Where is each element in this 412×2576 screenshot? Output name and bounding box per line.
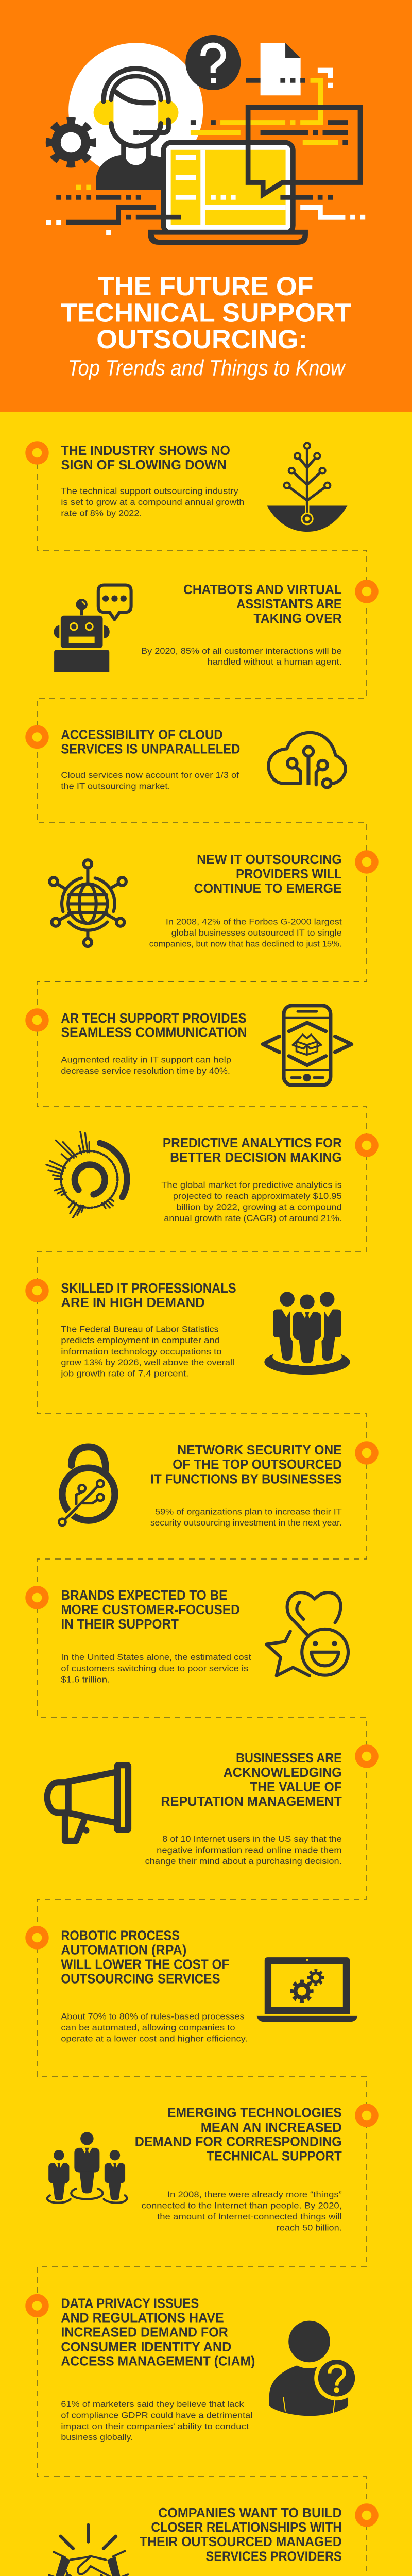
- heading: [140, 2506, 342, 2564]
- body text: In the United States alone, the estimated cost: [61, 1652, 251, 1662]
- panel: robotic process automation: [61, 1928, 357, 2043]
- heading: NETWORK SECURITY ONE: [177, 1443, 342, 1458]
- heading: ROBOTIC PROCESS: [61, 1928, 180, 1943]
- heading: SERVICES IS UNPARALLELED: [61, 742, 240, 757]
- body text: can be automated, allowing companies to: [61, 2023, 235, 2032]
- heading: IN THEIR SUPPORT: [61, 1617, 179, 1632]
- icon: AR phone: [263, 1006, 352, 1085]
- body text: grow 13% by 2026, well above the overall: [61, 1358, 234, 1367]
- heading: NEW IT OUTSOURCING: [197, 853, 342, 867]
- body text: predicts employment in computer and: [61, 1335, 220, 1345]
- panel: emerging technologies: [47, 2106, 342, 2233]
- body text: [150, 1506, 342, 1528]
- body text: annual growth rate (CAGR) of around 21%.: [164, 1213, 342, 1223]
- heading: DATA PRIVACY ISSUES: [61, 2297, 199, 2311]
- timeline nodes: [29, 445, 375, 2576]
- panel: orange hero header: [0, 0, 412, 412]
- panel: skilled IT professionals: [60, 1281, 350, 1379]
- heading: IT FUNCTIONS BY BUSINESSES: [150, 1472, 342, 1486]
- heading: AUTOMATION (RPA): [61, 1943, 186, 1957]
- heading: [61, 728, 240, 757]
- panel: predictive analytics: [161, 1136, 342, 1223]
- heading: SIGN OF SLOWING DOWN: [61, 458, 227, 472]
- panel: customer focused brands: [61, 1588, 348, 1685]
- body text: About 70% to 80% of rules-based processes: [61, 2011, 244, 2021]
- body text: In 2008, there were already more “things”: [167, 2190, 342, 2199]
- heading: [61, 444, 230, 472]
- icon: business team: [264, 1292, 350, 1375]
- body text: [61, 486, 244, 518]
- heading: [61, 2297, 255, 2368]
- heading: WILL LOWER THE COST OF: [61, 1958, 229, 1972]
- heading: AND REGULATIONS HAVE: [61, 2311, 224, 2326]
- body text: security outsourcing investment in the next year.: [150, 1518, 342, 1528]
- body text: Cloud services now account for over 1/3 of: [61, 770, 239, 780]
- panel: AR tech support: [61, 1006, 352, 1085]
- heading: SERVICES PROVIDERS: [205, 2549, 342, 2564]
- body text: billion by 2022, growing at a compound: [176, 1202, 342, 1212]
- heading: ARE IN HIGH DEMAND: [61, 1296, 205, 1310]
- icon: globe network: [49, 860, 126, 946]
- body text: [149, 917, 342, 949]
- icon: cloud circuit: [268, 733, 346, 787]
- body text: the IT outsourcing market.: [61, 782, 170, 791]
- heading: MEAN AN INCREASED: [201, 2121, 342, 2135]
- body text: of customers switching due to poor service is: [61, 1664, 248, 1673]
- heading: OF THE TOP OUTSOURCED: [173, 1458, 342, 1472]
- body text: The Federal Bureau of Labor Statistics: [61, 1324, 218, 1334]
- title: OUTSOURCING:: [96, 325, 307, 354]
- body text: of compliance GDPR could have a detrimental: [61, 2410, 252, 2420]
- body text: [60, 1324, 234, 1379]
- panel: new providers: [49, 853, 342, 949]
- body text: [161, 1180, 342, 1223]
- heading: [161, 1751, 342, 1809]
- panel: closer relationships: [140, 2506, 342, 2576]
- body text: companies, but now that has declined to just 15%.: [149, 939, 342, 949]
- body text: Augmented reality in IT support can help: [61, 1055, 231, 1065]
- heading: AR TECH SUPPORT PROVIDES: [61, 1011, 247, 1026]
- heading: SEAMLESS COMMUNICATION: [61, 1026, 247, 1040]
- decorative data lines upper: [191, 68, 348, 145]
- heading: [61, 1011, 247, 1040]
- body text: handled without a human agent.: [208, 657, 342, 667]
- icon: padlock circuit: [59, 1447, 115, 1526]
- body text: job growth rate of 7.4 percent.: [60, 1369, 188, 1379]
- heading: ACCESSIBILITY OF CLOUD: [61, 728, 223, 742]
- heading: [61, 1588, 240, 1632]
- heading: OUTSOURCING SERVICES: [61, 1972, 220, 1987]
- panel: chatbots: [54, 583, 342, 672]
- heading: ACCESS MANAGEMENT (CIAM): [61, 2354, 255, 2368]
- body text: the amount of Internet-connected things will: [157, 2212, 342, 2222]
- icon: heart star and smiley: [266, 1592, 348, 1676]
- heading: ASSISTANTS ARE: [236, 597, 342, 612]
- heading: EMERGING TECHNOLOGIES: [167, 2106, 342, 2121]
- heading: CHATBOTS AND VIRTUAL: [183, 583, 342, 597]
- icon: user with question mark: [269, 2321, 359, 2416]
- heading: THE VALUE OF: [250, 1780, 342, 1794]
- heading: [163, 1136, 342, 1165]
- body text: [61, 1055, 231, 1076]
- body text: business globally.: [61, 2432, 133, 2442]
- heading: CLOSER RELATIONSHIPS WITH: [151, 2520, 342, 2535]
- heading: [135, 2106, 342, 2163]
- heading: BRANDS EXPECTED TO BE: [61, 1588, 227, 1603]
- heading: THE INDUSTRY SHOWS NO: [61, 444, 230, 458]
- heading: [61, 1281, 236, 1310]
- body text: decrease service resolution time by 40%.: [61, 1066, 230, 1076]
- heading: COMPANIES WANT TO BUILD: [158, 2506, 342, 2520]
- body text: The technical support outsourcing industry: [61, 486, 238, 496]
- subtitle: Top Trends and Things to Know: [68, 356, 346, 381]
- heading: CONTINUE TO EMERGE: [194, 882, 342, 896]
- icon: robot with speech bubble: [54, 585, 131, 672]
- heading: [150, 1443, 342, 1486]
- body text: [141, 646, 342, 667]
- body text: 59% of organizations plan to increase their IT: [155, 1506, 342, 1516]
- body text: [61, 2011, 248, 2043]
- body text: impact on their companies’ ability to conduct: [61, 2421, 249, 2431]
- icon: laptop: [148, 143, 308, 245]
- icon: support agent with headset: [94, 69, 178, 190]
- body text: rate of 8% by 2022.: [61, 508, 142, 518]
- body text: global businesses outsourced IT to single: [171, 928, 342, 938]
- timeline dashed path: [37, 464, 367, 2576]
- body text: [145, 1834, 342, 1866]
- heading: REPUTATION MANAGEMENT: [161, 1794, 342, 1809]
- icon: handshake: [49, 2525, 128, 2576]
- body text: $1.6 trillion.: [61, 1675, 110, 1685]
- icon: document: [261, 43, 301, 95]
- body text: connected to the Internet than people. By 2020,: [141, 2201, 342, 2211]
- icon: white circle behind agent: [68, 43, 203, 177]
- icon: megaphone: [47, 1762, 131, 1841]
- icon: question bubble: [185, 35, 241, 90]
- title: TECHNICAL SUPPORT: [61, 298, 351, 327]
- heading: CONSUMER IDENTITY AND: [61, 2340, 231, 2354]
- title: [61, 272, 351, 354]
- body text: negative information read online made them: [157, 1845, 342, 1855]
- heading: BUSINESSES ARE: [236, 1751, 342, 1766]
- body text: [61, 1652, 251, 1685]
- title: THE FUTURE OF: [98, 272, 314, 301]
- icon: three business people: [47, 2132, 127, 2203]
- body text: 8 of 10 Internet users in the US say that the: [162, 1834, 342, 1844]
- heading: [61, 1928, 229, 1987]
- panel: cloud services: [61, 728, 346, 791]
- heading: SKILLED IT PROFESSIONALS: [61, 1281, 236, 1296]
- body text: [61, 770, 239, 791]
- panel: network security: [59, 1443, 342, 1528]
- panel: slowing down: [61, 443, 347, 532]
- heading: ACKNOWLEDGING: [224, 1766, 342, 1780]
- body text: projected to reach approximately $10.95: [173, 1191, 342, 1201]
- heading: TECHNICAL SUPPORT: [207, 2149, 342, 2163]
- heading: THEIR OUTSOURCED MANAGED: [140, 2535, 342, 2549]
- heading: [194, 853, 342, 896]
- body text: operate at a lower cost and higher efficiency.: [61, 2033, 248, 2043]
- body text: information technology occupations to: [61, 1347, 222, 1357]
- body text: 61% of marketers said they believe that lack: [61, 2399, 244, 2409]
- heading: MORE CUSTOMER-FOCUSED: [61, 1603, 240, 1617]
- decorative data lines lower: [46, 185, 365, 235]
- panel: reputation management: [47, 1751, 342, 1866]
- body text: is set to grow at a compound annual growth: [61, 497, 244, 507]
- panel: data privacy: [61, 2297, 359, 2442]
- heading: INCREASED DEMAND FOR: [61, 2326, 228, 2340]
- icon: radial analytics: [46, 1132, 127, 1217]
- heading: BETTER DECISION MAKING: [170, 1150, 342, 1165]
- icon: gear: [49, 121, 93, 164]
- icon: laptop with gears: [256, 1957, 357, 2022]
- body text: In 2008, 42% of the Forbes G-2000 largest: [166, 917, 342, 927]
- icon: tree in bowl: [267, 443, 347, 532]
- heading: DEMAND FOR CORRESPONDING: [135, 2134, 342, 2149]
- body text: reach 50 billion.: [277, 2223, 342, 2233]
- body text: By 2020, 85% of all customer interactions will be: [141, 646, 342, 656]
- body text: The global market for predictive analytics is: [161, 1180, 342, 1190]
- heading: PROVIDERS WILL: [236, 867, 342, 882]
- heading: [183, 583, 342, 626]
- icon: speech bubble outline: [248, 108, 360, 195]
- body text: [61, 2399, 252, 2442]
- body text: [141, 2190, 342, 2233]
- body text: change their mind about a purchasing decision.: [145, 1856, 342, 1866]
- heading: TAKING OVER: [253, 612, 342, 626]
- heading: PREDICTIVE ANALYTICS FOR: [163, 1136, 342, 1150]
